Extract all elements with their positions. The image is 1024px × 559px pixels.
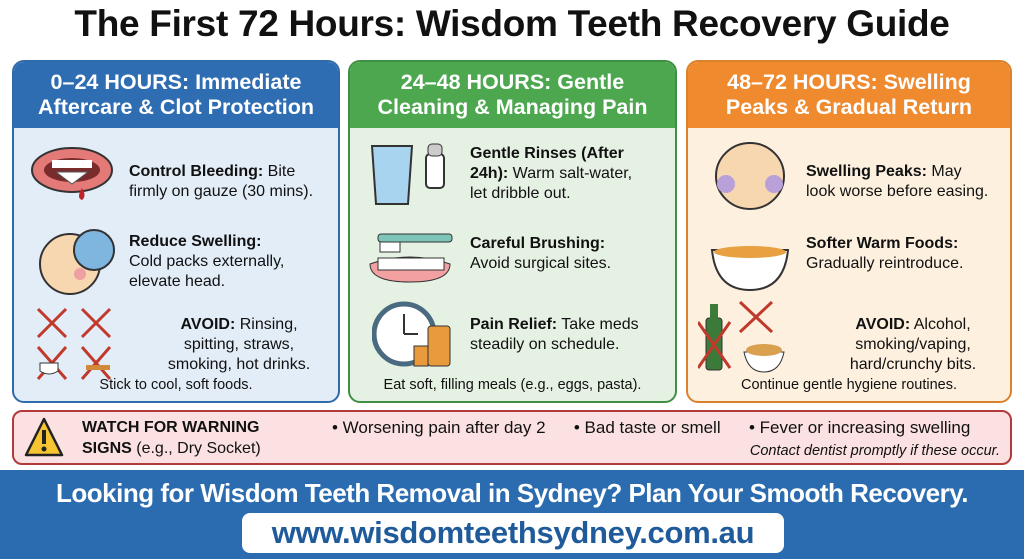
icon: avoid items bbox=[37, 308, 111, 380]
icon: swollen face bbox=[715, 142, 785, 210]
warning signs box bbox=[12, 410, 1012, 465]
text: avoid: AVOID: Alcohol, bbox=[855, 316, 971, 333]
icon: toothbrush bbox=[370, 234, 452, 282]
url pill: www.wisdomteethsydney.com.au bbox=[272, 515, 754, 550]
footer banner bbox=[0, 470, 1024, 559]
text: warning list: • Worsening pain after day 2 • Bad taste or smell • Fever or increasing swelling bbox=[332, 418, 970, 437]
heading: 24-48: 24–48 HOURS: Gentle bbox=[401, 70, 624, 94]
text: control bleeding: firmly on gauze (30 mins). bbox=[129, 183, 313, 200]
panel: 24-48 hours bbox=[348, 60, 677, 403]
text: avoid: smoking/vaping, bbox=[855, 336, 971, 353]
footer note: Stick to cool, soft foods. bbox=[99, 377, 253, 393]
text: warning heading: SIGNS (e.g., Dry Socket) bbox=[82, 440, 261, 457]
text: swelling peaks: look worse before easing. bbox=[806, 183, 988, 200]
heading: 48-72: 48–72 HOURS: Swelling bbox=[727, 70, 971, 94]
icon: clock and meds bbox=[372, 302, 450, 366]
text: gentle rinses: Gentle Rinses (After bbox=[470, 145, 624, 162]
icon: alcohol smoking nuts bbox=[698, 300, 785, 372]
text: swelling peaks bbox=[806, 163, 988, 200]
text: avoid: hard/crunchy bits. bbox=[850, 356, 976, 373]
icon: water and salt bbox=[370, 144, 445, 205]
text: pain relief bbox=[470, 316, 639, 353]
text: careful brushing: Careful Brushing: bbox=[470, 235, 605, 252]
heading: 48-72 bbox=[688, 62, 1010, 128]
text: contact note: Contact dentist promptly if these occur. bbox=[750, 443, 1000, 459]
text: gentle rinses bbox=[470, 145, 632, 202]
icon: warning triangle bbox=[24, 418, 64, 456]
title: The First 72 Hours: Wisdom Teeth Recovery Guide bbox=[74, 3, 950, 44]
text: control bleeding bbox=[129, 163, 313, 200]
text: gentle rinses: let dribble out. bbox=[470, 185, 571, 202]
text: pain relief: Pain Relief: Take meds bbox=[470, 316, 639, 333]
text: softer warm foods: Gradually reintroduce. bbox=[806, 255, 963, 272]
heading: 0-24: 0–24 HOURS: Immediate bbox=[51, 70, 301, 94]
text: careful brushing: Avoid surgical sites. bbox=[470, 255, 611, 272]
text: softer warm foods bbox=[806, 235, 963, 272]
text: warning heading: WATCH FOR WARNING bbox=[82, 419, 259, 436]
footer note: Eat soft, filling meals (e.g., eggs, pasta). bbox=[384, 377, 641, 393]
text: avoid bbox=[850, 316, 976, 373]
heading: 24-48 bbox=[350, 62, 675, 128]
panel: 48-72 hours bbox=[686, 60, 1012, 403]
text: avoid: spitting, straws, bbox=[184, 336, 294, 353]
text: reduce swelling: elevate head. bbox=[129, 273, 225, 290]
text: reduce swelling: Cold packs externally, bbox=[129, 253, 284, 270]
text: reduce swelling: Reduce Swelling: bbox=[129, 233, 261, 250]
text: reduce swelling bbox=[129, 233, 284, 290]
footer headline: Looking for Wisdom Teeth Removal in Sydney? Plan Your Smooth Recovery. bbox=[56, 478, 968, 508]
text: gentle rinses: 24h): Warm salt-water, bbox=[470, 165, 632, 182]
text: careful brushing bbox=[470, 235, 611, 272]
text: avoid: AVOID: Rinsing, bbox=[180, 316, 298, 333]
footer note: Continue gentle hygiene routines. bbox=[741, 377, 957, 393]
text: avoid bbox=[168, 316, 310, 373]
text: pain relief: steadily on schedule. bbox=[470, 336, 619, 353]
heading: 0-24 bbox=[14, 62, 338, 128]
heading: 48-72: Peaks & Gradual Return bbox=[726, 95, 972, 119]
text: control bleeding: Control Bleeding: Bite bbox=[129, 163, 295, 180]
text: swelling peaks: Swelling Peaks: May bbox=[806, 163, 962, 180]
text: warning heading bbox=[82, 419, 261, 457]
icon: soup bowl bbox=[710, 246, 790, 291]
icon: face with ice pack bbox=[39, 229, 115, 295]
heading: 24-48: Cleaning & Managing Pain bbox=[378, 95, 647, 119]
heading: 0-24: Aftercare & Clot Protection bbox=[38, 95, 314, 119]
panel: 0-24 hours bbox=[12, 60, 340, 403]
text: softer warm foods: Softer Warm Foods: bbox=[806, 235, 958, 252]
icon: mouth gauze bbox=[31, 147, 113, 200]
text: avoid: smoking, hot drinks. bbox=[168, 356, 310, 373]
